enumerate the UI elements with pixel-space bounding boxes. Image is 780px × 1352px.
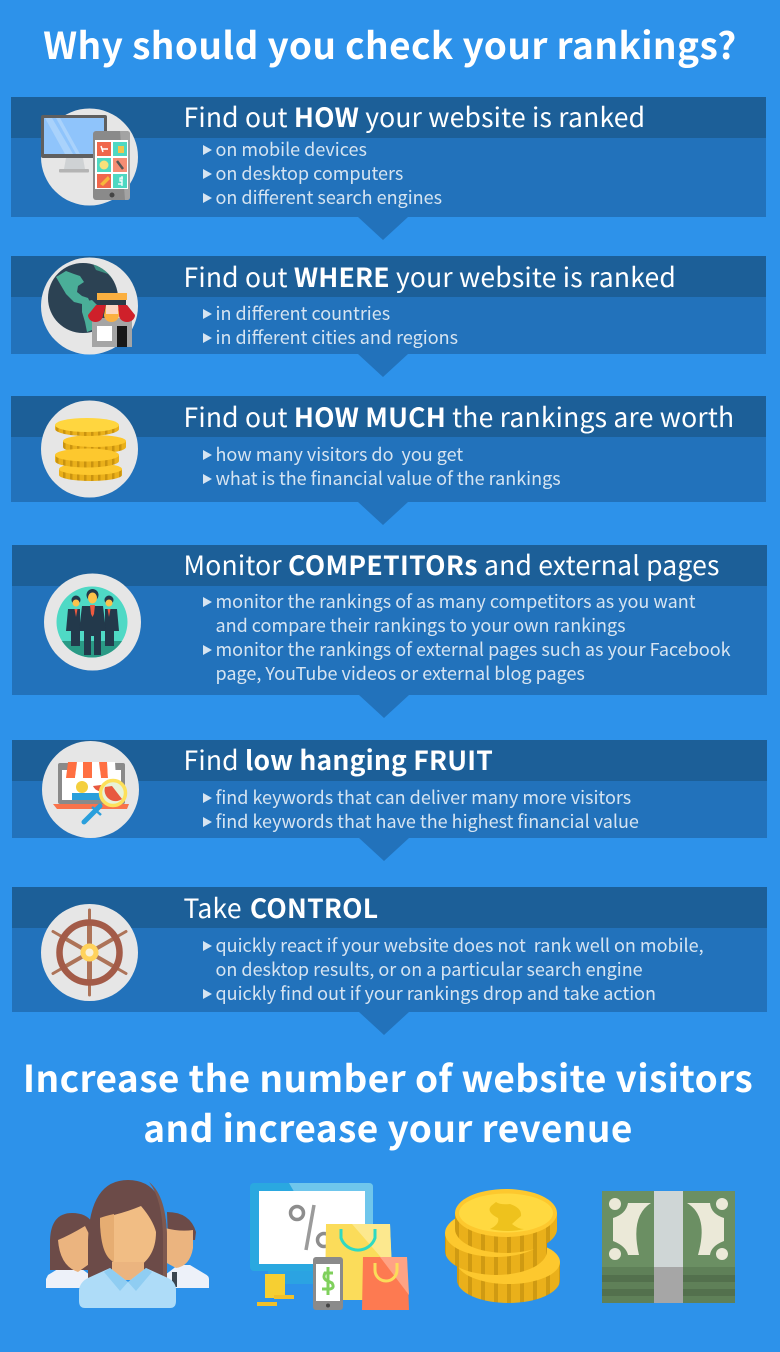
list: competitors: monitor the rankings of external pages such as your Facebook: [216, 636, 731, 662]
panel: how: [11, 96, 766, 240]
heading: control: Take CONTROL: [184, 887, 378, 926]
list: competitors: and compare their rankings to your own rankings: [216, 612, 626, 638]
icon: people: [46, 1180, 209, 1308]
closing heading: [23, 1049, 753, 1153]
list: control: [203, 932, 704, 1006]
panel: where: [11, 256, 766, 377]
list: control: on desktop results, or on a particular search engine: [216, 956, 643, 982]
list: control: quickly find out if your rankings drop and take action: [216, 980, 656, 1006]
list: where: in different countries: [216, 300, 390, 326]
list: control: quickly react if your website does not rank well on mobile,: [216, 932, 704, 958]
list: how: on desktop computers: [216, 160, 403, 186]
closing heading: Increase the number of website visitors: [23, 1049, 753, 1103]
closing heading: and increase your revenue: [143, 1099, 633, 1153]
list: how much: what is the financial value of the rankings: [216, 465, 561, 491]
heading: how: Find out HOW your website is ranked: [184, 96, 645, 135]
icon: online shopping: [250, 1183, 409, 1310]
title: Why should you check your rankings?: [43, 16, 737, 70]
list: how: [203, 136, 442, 210]
heading: where: Find out WHERE your website is ranked: [184, 256, 676, 295]
heading: competitors: Monitor COMPETITORs and external pages: [184, 544, 720, 583]
list: where: [203, 300, 458, 350]
panel: competitors: [12, 544, 767, 718]
panel: control: [12, 887, 767, 1035]
panel: how much: [11, 396, 766, 525]
icon: coin stack: [445, 1189, 560, 1303]
list: fruit: [203, 784, 639, 834]
icon: business people: [44, 574, 141, 670]
icon: monitor and phone: [41, 108, 138, 206]
list: how: on mobile devices: [216, 136, 367, 162]
list: how much: how many visitors do you get: [216, 441, 463, 467]
heading: how much: Find out HOW MUCH the rankings are worth: [184, 396, 734, 435]
icon: globe and shop: [41, 258, 138, 354]
list: fruit: find keywords that can deliver many more visitors: [216, 784, 631, 810]
list: competitors: page, YouTube videos or external blog pages: [216, 660, 585, 686]
list: how: on different search engines: [216, 184, 442, 210]
icon: coins: [41, 400, 138, 498]
heading: fruit: Find low hanging FRUIT: [184, 739, 493, 778]
icon: laptop, awning and magnifier: [42, 741, 139, 838]
list: where: in different cities and regions: [216, 324, 458, 350]
list: competitors: [203, 588, 731, 686]
list: competitors: monitor the rankings of as many competitors as you want: [216, 588, 696, 614]
list: how much: [203, 441, 561, 491]
list: fruit: find keywords that have the highest financial value: [216, 808, 639, 834]
icon: ship wheel: [41, 904, 138, 1001]
icon: banknotes: [602, 1191, 735, 1303]
panel: fruit: [12, 739, 767, 861]
